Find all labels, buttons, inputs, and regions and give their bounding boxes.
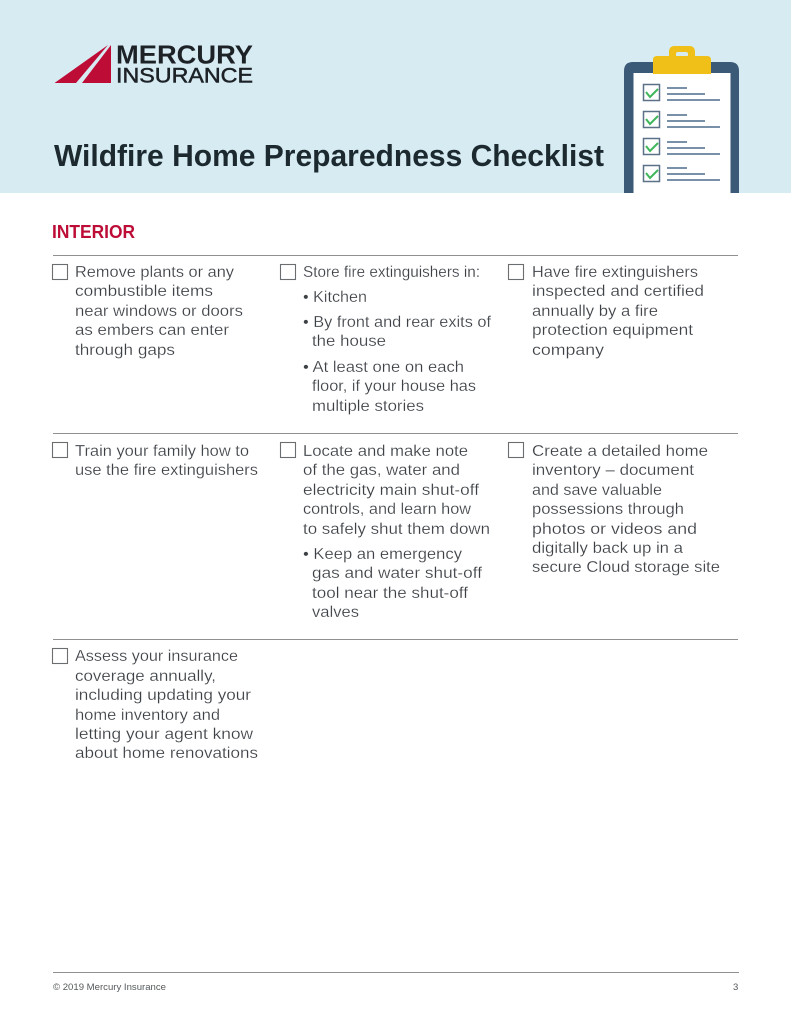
item: store fire extinguishers: multiple stories [312,398,424,415]
item: home inventory: Create a detailed home [532,443,708,460]
item: locate shut-off controls: of the gas, water and [303,462,460,479]
footer: page number: 3 [733,982,738,993]
header band [0,0,791,193]
item: assess insurance coverage: Assess your insurance [75,648,238,665]
title: Wildfire Home Preparedness Checklist [54,138,604,173]
item: inspect extinguishers [508,264,704,359]
item: home inventory: secure Cloud storage site [532,559,720,576]
footer: copyright: © 2019 Mercury Insurance [53,982,166,993]
item: home inventory: possessions through [532,501,684,518]
item: store fire extinguishers: Store fire extinguishers in: [303,264,480,281]
item: assess insurance coverage [52,648,258,762]
item: inspect extinguishers: protection equipment [532,322,694,339]
item: store fire extinguishers: floor, if your house has [312,378,476,395]
item: remove plants: near windows or doors [75,303,243,320]
item: assess insurance coverage: about home renovations [75,745,258,762]
item: inspect extinguishers: company [532,342,604,359]
item: home inventory [508,442,720,576]
item: remove plants: combustible items [75,283,213,300]
item: locate shut-off controls: gas and water shut-off [312,565,483,582]
item: locate shut-off controls: electricity main shut-off [303,482,480,499]
item: locate shut-off controls: controls, and learn how [303,501,472,518]
item: store fire extinguishers: the house [312,333,386,350]
item: locate shut-off controls: to safely shut them down [303,521,490,538]
section heading: interior: INTERIOR [52,221,135,242]
logo: Mercury Insurance: MERCURY [116,42,253,70]
item: store fire extinguishers: • By front and rear exits of [303,314,492,331]
item: assess insurance coverage: coverage annually, [75,668,216,685]
item: remove plants: as embers can enter [75,322,229,339]
item: assess insurance coverage: home inventory and [75,707,220,724]
item: locate shut-off controls: Locate and make note [303,443,468,460]
item: inspect extinguishers: annually by a fire [532,303,658,320]
item: assess insurance coverage: letting your agent know [75,726,254,743]
item: home inventory: inventory – document [532,462,695,479]
item: locate shut-off controls: tool near the shut-off [312,585,469,602]
item: home inventory: digitally back up in a [532,540,683,557]
item: remove plants: through gaps [75,342,175,359]
item: remove plants: Remove plants or any [75,264,234,281]
item: inspect extinguishers: Have fire extinguishers [532,264,698,281]
item: remove plants [52,264,243,359]
item: assess insurance coverage: including updating your [75,687,251,704]
item: locate shut-off controls: valves [312,604,359,621]
item: store fire extinguishers [280,264,492,415]
item: store fire extinguishers: • At least one on each [303,359,464,376]
item: inspect extinguishers: inspected and certified [532,283,704,300]
item: train family: use the fire extinguishers [75,462,258,479]
item: locate shut-off controls [280,442,490,621]
item: store fire extinguishers: • Kitchen [303,289,367,306]
item: train family: Train your family how to [75,443,249,460]
logo: Mercury Insurance: INSURANCE [116,64,253,88]
item: train family [52,442,258,479]
icon: clipboard [624,46,739,193]
item: home inventory: and save valuable [532,482,662,499]
logo: Mercury Insurance [54,42,253,88]
item: home inventory: photos or videos and [532,521,697,538]
item: locate shut-off controls: • Keep an emergency [303,546,462,563]
